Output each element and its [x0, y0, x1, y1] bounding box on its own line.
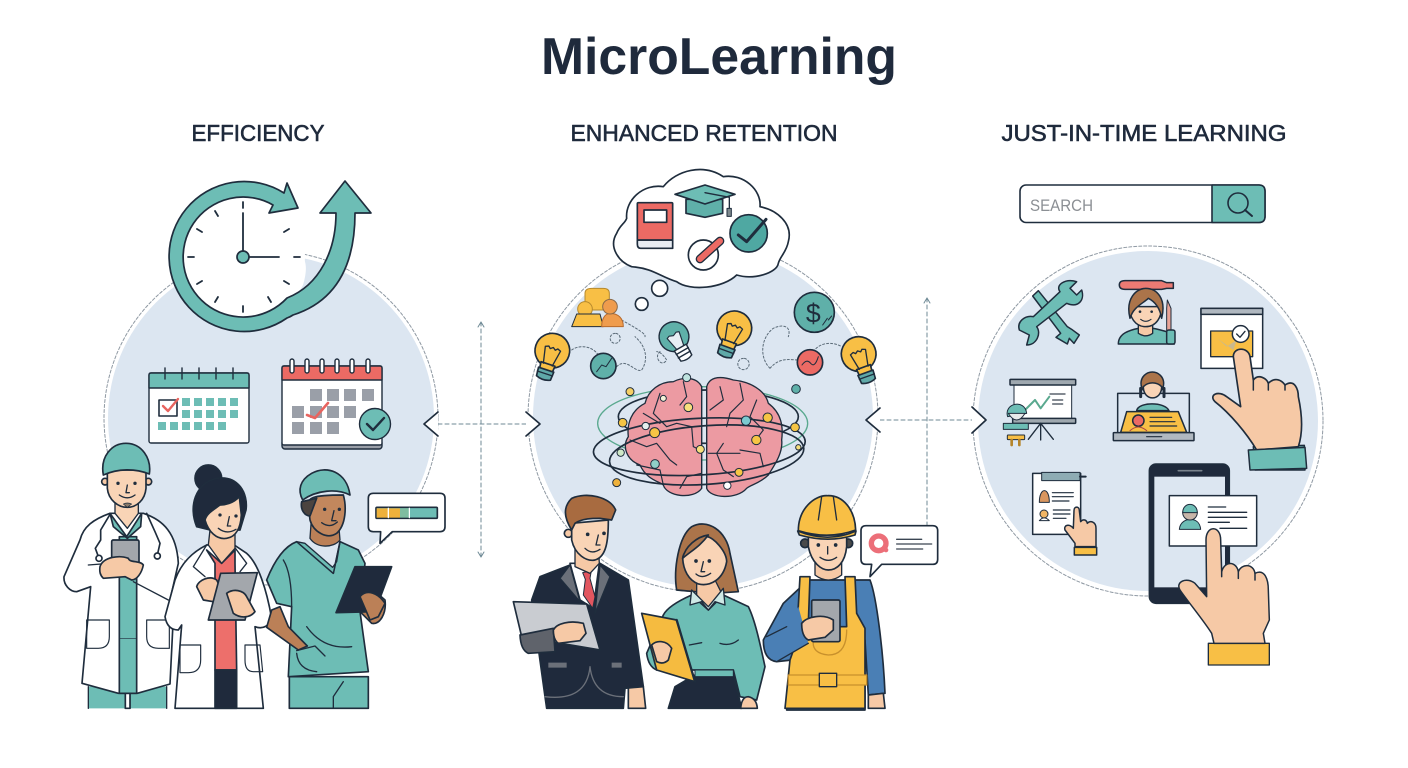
icon: teal bulb: [654, 316, 700, 367]
icon: teal shirt cuff: [1248, 447, 1307, 470]
icon: teal calendar: [149, 368, 249, 443]
icon: laptop webinar: [1113, 372, 1194, 441]
icon: smartphone with profile card and hand: [1149, 464, 1269, 665]
icon: light bulb right: [836, 332, 885, 388]
icon: dollar coin: $: [806, 299, 821, 329]
icon: check circle: [730, 215, 767, 252]
panel background: efficiency circle: [104, 251, 438, 585]
icons: on-demand resources: [1003, 281, 1305, 470]
arrow: connector retention to just-in-time: [866, 298, 986, 525]
figure: office woman: [642, 524, 765, 708]
illustration: brain with orbits: [592, 374, 808, 496]
figure: male nurse: [267, 470, 392, 708]
figure: male doctor: [64, 443, 178, 708]
icons: mobile and document resources: [1033, 447, 1307, 665]
title: MicroLearning: [541, 28, 897, 86]
icon: crossed wrench and screwdriver: [1019, 281, 1083, 345]
icon: dollar coin: [794, 292, 834, 332]
icon: thought bubble with learning symbols: [614, 170, 789, 310]
figure: businessman: [513, 495, 646, 708]
icon: browser card with pointing hand: [1201, 308, 1305, 470]
callout: message speech bubble: [861, 526, 938, 577]
figure: female doctor: [165, 465, 272, 708]
figure: construction worker: [763, 496, 885, 710]
panel background: just-in-time circle: [973, 246, 1323, 596]
icons: ideas floating above brain: [526, 288, 885, 388]
icon: light bulb centre: [708, 306, 757, 363]
icon: small teal chart circle: [591, 353, 616, 379]
decorative dashed trails: [572, 320, 842, 370]
icon: people group: [572, 288, 623, 327]
heading: efficiency: EFFICIENCY: [192, 120, 324, 146]
icon: search bar: [1020, 185, 1265, 222]
heading: just-in-time learning: JUST-IN-TIME LEARNING: [1002, 120, 1286, 146]
icon: red trend circle: [797, 350, 823, 375]
panel background: retention circle: [528, 242, 878, 592]
icon: clock with circular arrow: [169, 181, 371, 331]
people group: office and trade workers: [513, 495, 938, 710]
icon: light bulb left: [526, 329, 574, 385]
icon: red tick circle: [688, 240, 720, 270]
icon: document with small hand: [1033, 472, 1097, 555]
people group: healthcare workers: [64, 443, 445, 708]
icon: presentation board: [1003, 379, 1076, 445]
icon: book: [637, 203, 673, 248]
icon: graduation cap: [675, 185, 735, 217]
icon: red calendar with check badge: [282, 359, 390, 449]
icon: person with red bar: [1118, 281, 1175, 344]
heading: enhanced retention: ENHANCED RETENTION: [570, 120, 838, 146]
icon: search bar: SEARCH: [1030, 196, 1093, 215]
arrow: connector efficiency to retention: [424, 322, 540, 557]
callout: progress bar speech bubble: [368, 493, 445, 543]
